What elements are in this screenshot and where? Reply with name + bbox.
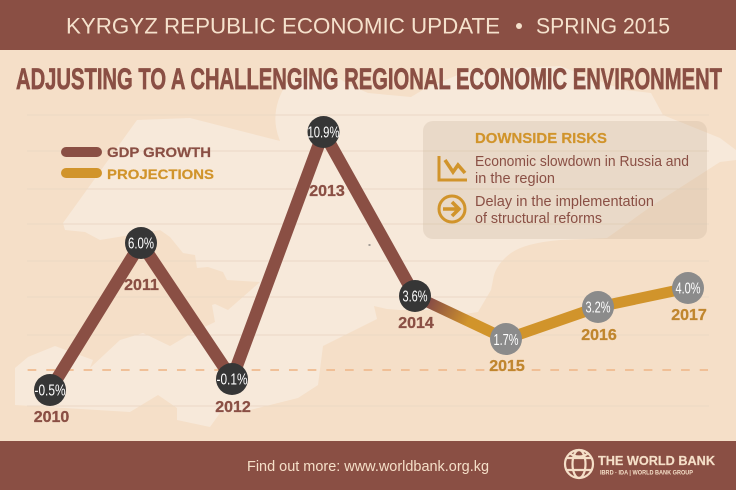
year labels: 2010: [34, 409, 69, 426]
header bar: [0, 0, 736, 50]
icon: arrow circle: [439, 196, 465, 222]
logo wordmark: [598, 453, 716, 476]
grid lines: [27, 115, 709, 406]
icon: world bank globe: [565, 450, 593, 478]
year labels: 2014: [398, 315, 434, 332]
header bar: SPRING 2015: [536, 14, 670, 38]
risk text: economic slowdown: in the region: [475, 170, 555, 187]
data values: -0.1%: [216, 372, 248, 388]
data values: -0.5%: [34, 382, 66, 400]
data values: [34, 124, 700, 400]
year labels: 2016: [581, 327, 617, 344]
data values: 6.0%: [128, 236, 154, 252]
footer bar: [0, 441, 736, 490]
line chart: GDP growth: [50, 132, 688, 390]
year labels: 2011: [124, 277, 159, 294]
data values: 4.0%: [676, 280, 700, 298]
panel: downside risks: DOWNSIDE RISKS: [475, 131, 607, 147]
risk text: delay in reforms: [475, 193, 654, 227]
footer link text: Find out more: www.worldbank.org.kg: [247, 459, 489, 475]
logo wordmark: IBRD · IDA | WORLD BANK GROUP: [600, 470, 694, 476]
year labels: 2015: [489, 358, 525, 375]
legend: GDP GROWTH: [107, 144, 211, 160]
icon: falling chart: [439, 156, 467, 180]
data points: [34, 116, 704, 406]
data values: 3.6%: [402, 288, 428, 306]
logo wordmark: THE WORLD BANK: [598, 453, 716, 468]
header bar: KYRGYZ REPUBLIC ECONOMIC UPDATE: [66, 14, 500, 38]
risk text: delay in reforms: of structural reforms: [475, 210, 602, 227]
year labels: 2017: [671, 307, 707, 324]
year labels: [34, 183, 707, 426]
projections line: [506, 288, 688, 339]
transition segment: [415, 296, 506, 339]
zero baseline dashed: [28, 369, 708, 371]
risk text: economic slowdown: Economic slowdown in Russia and: [475, 153, 689, 170]
year labels: 2012: [215, 399, 251, 416]
panel: downside risks: [423, 121, 707, 239]
legend: [61, 144, 214, 182]
stray mark: [368, 244, 370, 246]
risk text: delay in reforms: Delay in the implementation: [475, 193, 654, 210]
year labels: 2013: [309, 183, 345, 200]
risk text: economic slowdown: [475, 153, 689, 187]
background map silhouette: [15, 66, 736, 427]
data values: 3.2%: [586, 300, 610, 316]
legend: PROJECTIONS: [107, 166, 214, 182]
data values: 1.7%: [494, 332, 518, 349]
data values: 10.9%: [308, 124, 340, 142]
